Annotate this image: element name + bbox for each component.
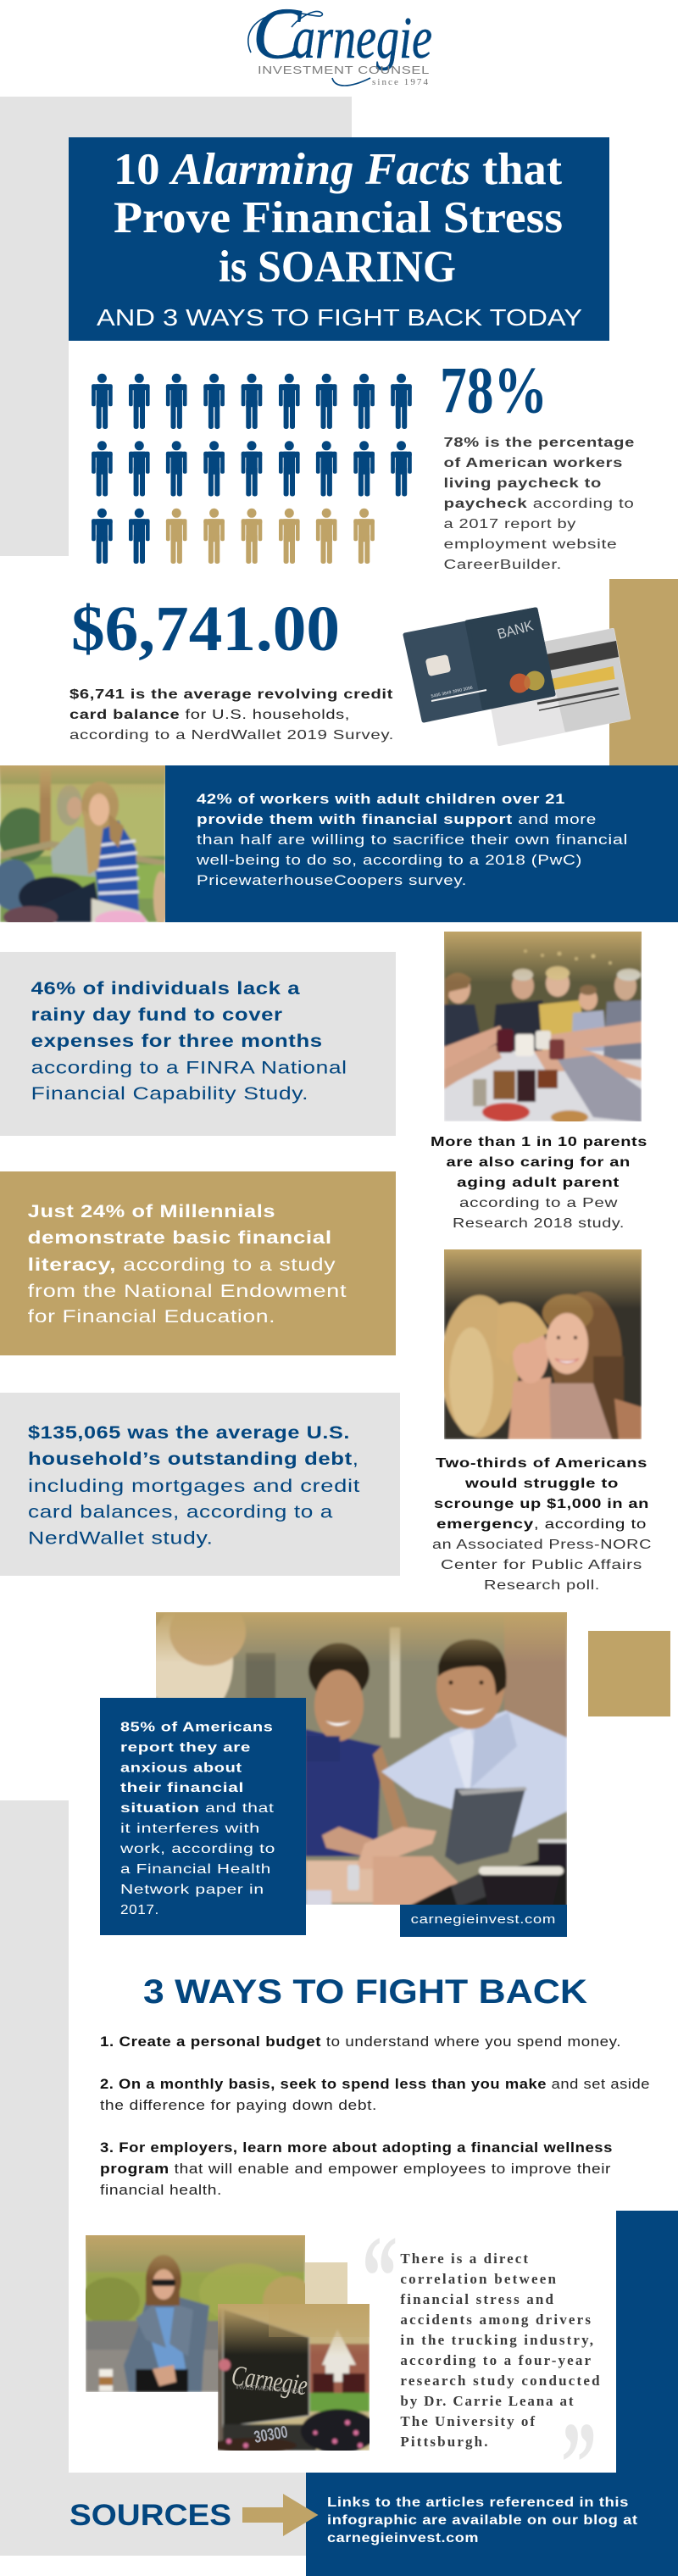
panel: adult children support: PricewaterhouseCoopers survey. (197, 873, 467, 888)
title panel: 10 Alarming Facts that (114, 145, 562, 194)
panel: adult children support (165, 765, 678, 922)
photo: family dinner toast (444, 932, 642, 1124)
panel: 85% of Americans anxious: 85% of Americans (120, 1721, 273, 1734)
panel: millennial financial literacy (0, 1171, 396, 1355)
panel: adult children support: provide them with financial support and more (197, 812, 597, 827)
panel: household debt: card balances, according to a (28, 1502, 333, 1522)
panel: millennial financial literacy: Just 24% of Millennials (28, 1202, 275, 1221)
panel: millennial financial literacy: demonstrate basic financial (28, 1228, 332, 1248)
text: quote: by Dr. Carrie Leana at (400, 2393, 574, 2409)
panel: 85% of Americans anxious: report they are (120, 1740, 251, 1755)
text: credit card balance: $6,741 is the average revolving credit (69, 687, 393, 702)
title panel: AND 3 WAYS TO FIGHT BACK TODAY (97, 304, 582, 331)
heading: sources: SOURCES (69, 2499, 231, 2532)
list: 3 ways (100, 2034, 650, 2198)
text: 78% description: a 2017 report by (444, 517, 576, 531)
panel: 85% of Americans anxious: it interferes with (120, 1822, 260, 1836)
panel: household debt: household’s outstanding debt , (28, 1449, 359, 1469)
text: $1,000 emergency caption: would struggle to (464, 1477, 619, 1491)
panel: 85% of Americans anxious (100, 1698, 306, 1935)
gold side block (609, 579, 678, 765)
panel: adult children support: well-being to do so, according to a 2018 (PwC) (196, 853, 582, 868)
text: aging parents caption: More than 1 in 10 parents (431, 1135, 647, 1149)
text: 78% description: of American workers (444, 456, 623, 470)
website tag (400, 1905, 567, 1937)
list: 3 ways: 2. On a monthly basis, seek to spend less than you make and set aside (100, 2077, 650, 2092)
panel: rainy day fund (0, 952, 396, 1136)
panel: rainy day fund: Financial Capability Study. (31, 1084, 308, 1104)
logo: arnegie (292, 6, 432, 71)
heading: 3 ways to fight back: 3 WAYS TO FIGHT BACK (143, 1973, 587, 2011)
list: 3 ways: program that will enable and empower employees to improve their (100, 2162, 611, 2177)
text: $1,000 emergency caption: an Associated Press-NORC (432, 1538, 652, 1552)
text: 78% description: CareerBuilder. (444, 558, 562, 572)
panel: 85% of Americans anxious: situation and that (120, 1801, 275, 1816)
text: credit card balance: card balance for U.S. households, (69, 708, 350, 722)
icon: closing quote mark: ” (561, 2398, 597, 2528)
photo: Carnegie office sign (212, 2304, 377, 2453)
list: 3 ways: the difference for paying down debt. (100, 2098, 377, 2113)
grey backdrop: top L shape (0, 97, 352, 556)
photo: woman on bench with coffee (81, 2235, 314, 2392)
text: aging parents caption (431, 1135, 647, 1231)
stat: 78%: 78% (440, 353, 547, 427)
text: quote: in the trucking industry, (400, 2332, 593, 2348)
text: $1,000 emergency caption: Research poll. (484, 1578, 600, 1593)
text: quote: There is a direct (400, 2251, 528, 2267)
stat: $6,741.00: $6,741.00 (71, 593, 340, 665)
text: quote: according to a four-year (400, 2352, 591, 2368)
title panel (69, 137, 609, 341)
pictogram: 78 of 100 people (92, 374, 412, 564)
photo: Carnegie office sign: Carnegie (230, 2360, 309, 2401)
panel: 85% of Americans anxious: their financial (120, 1781, 244, 1795)
panel: rainy day fund: rainy day fund to cover (31, 1005, 283, 1025)
panel: household debt: NerdWallet study. (28, 1529, 214, 1549)
photo: smiling couple with tablet (148, 1598, 567, 1907)
panel: household debt: $135,065 was the average U.S. (28, 1423, 350, 1443)
panel: rainy day fund: expenses for three months (31, 1032, 323, 1051)
text: aging parents caption: are also caring for an (446, 1155, 631, 1170)
text: quote: accidents among drivers (400, 2312, 591, 2328)
website tag: carnegieinvest.com (411, 1912, 556, 1927)
logo (248, 0, 432, 87)
photo: Carnegie office sign: 30300 (253, 2423, 289, 2447)
text: credit card balance (69, 687, 394, 743)
list: 3 ways: 3. For employers, learn more about adopting a financial wellness (100, 2140, 613, 2156)
title panel: Prove Financial Stress (114, 193, 563, 242)
panel: 85% of Americans anxious: a Financial Health (120, 1862, 271, 1877)
grey backdrop: lower strip (0, 1800, 306, 2556)
panel: household debt (0, 1393, 400, 1576)
panel: millennial financial literacy: literacy, according to a study (28, 1255, 336, 1275)
photo: mother kissing daughter (441, 1249, 642, 1439)
text: 78% description: living paycheck to (444, 476, 602, 491)
panel: adult children support: than half are willing to sacrifice their own financial (197, 832, 628, 848)
list: 3 ways: 1. Create a personal budget to understand where you spend money. (100, 2034, 621, 2050)
text: 78% description: employment website (444, 537, 617, 552)
icon: credit cards: BANK (496, 617, 536, 643)
panel: millennial financial literacy: from the National Endowment (28, 1282, 347, 1301)
panel: rainy day fund: according to a FINRA National (31, 1058, 347, 1078)
text: 78% description: paycheck according to (444, 497, 634, 511)
panel: household debt: including mortgages and credit (28, 1477, 360, 1496)
blue backdrop: lower right (306, 2211, 678, 2576)
logo: INVESTMENT COUNSEL (258, 64, 430, 76)
text: quote: financial stress and (400, 2291, 554, 2307)
text: sources note: infographic are available on our blog at (327, 2513, 638, 2528)
text: credit card balance: according to a NerdWallet 2019 Survey. (69, 728, 394, 743)
icon: opening quote mark: “ (362, 2212, 397, 2341)
panel: 85% of Americans anxious: work, according to (119, 1842, 275, 1856)
icon: credit cards: 5495 3849 3990 3096 (431, 686, 474, 699)
beige accent square (305, 2262, 347, 2304)
text: sources note: Links to the articles referenced in this (327, 2495, 629, 2510)
text: 78% description: 78% is the percentage (444, 436, 635, 450)
text: $1,000 emergency caption: emergency , according to (436, 1517, 647, 1532)
text: sources note (327, 2495, 638, 2545)
text: quote (400, 2251, 600, 2450)
panel: millennial financial literacy: for Financial Education. (28, 1307, 275, 1327)
gold square accent (588, 1631, 670, 1716)
photo: mother and daughter at picnic (0, 765, 169, 931)
text: aging parents caption: aging adult parent (457, 1176, 620, 1190)
panel: rainy day fund: 46% of individuals lack a (31, 979, 300, 999)
panel: 85% of Americans anxious: 2017. (120, 1903, 159, 1917)
text: 78% description (444, 436, 635, 572)
text: quote: Pittsburgh. (400, 2434, 488, 2450)
text: quote: research study conducted (400, 2373, 600, 2389)
title panel: is SOARING (219, 242, 456, 292)
text: $1,000 emergency caption: Center for Public Affairs (441, 1558, 642, 1572)
panel: 85% of Americans anxious: Network paper in (120, 1883, 264, 1897)
icon: credit cards (405, 609, 629, 744)
text: aging parents caption: Research 2018 study. (453, 1216, 625, 1231)
text: $1,000 emergency caption (432, 1456, 652, 1593)
text: quote: The University of (400, 2413, 535, 2429)
text: $1,000 emergency caption: scrounge up $1,000 in an (434, 1497, 649, 1511)
text: sources note: carnegieinvest.com (327, 2531, 479, 2545)
arrow (242, 2494, 319, 2536)
logo: since 1974 (372, 77, 429, 87)
panel: adult children support: 42% of workers with adult children over 21 (197, 792, 565, 807)
list: 3 ways: financial health. (100, 2183, 222, 2198)
photo: Carnegie office sign: INVESTMENT COUNSEL (236, 2383, 306, 2395)
panel: 85% of Americans anxious: anxious about (120, 1761, 242, 1775)
text: $1,000 emergency caption: Two-thirds of Americans (436, 1456, 647, 1471)
text: quote: correlation between (400, 2271, 557, 2287)
text: aging parents caption: according to a Pew (459, 1196, 618, 1210)
